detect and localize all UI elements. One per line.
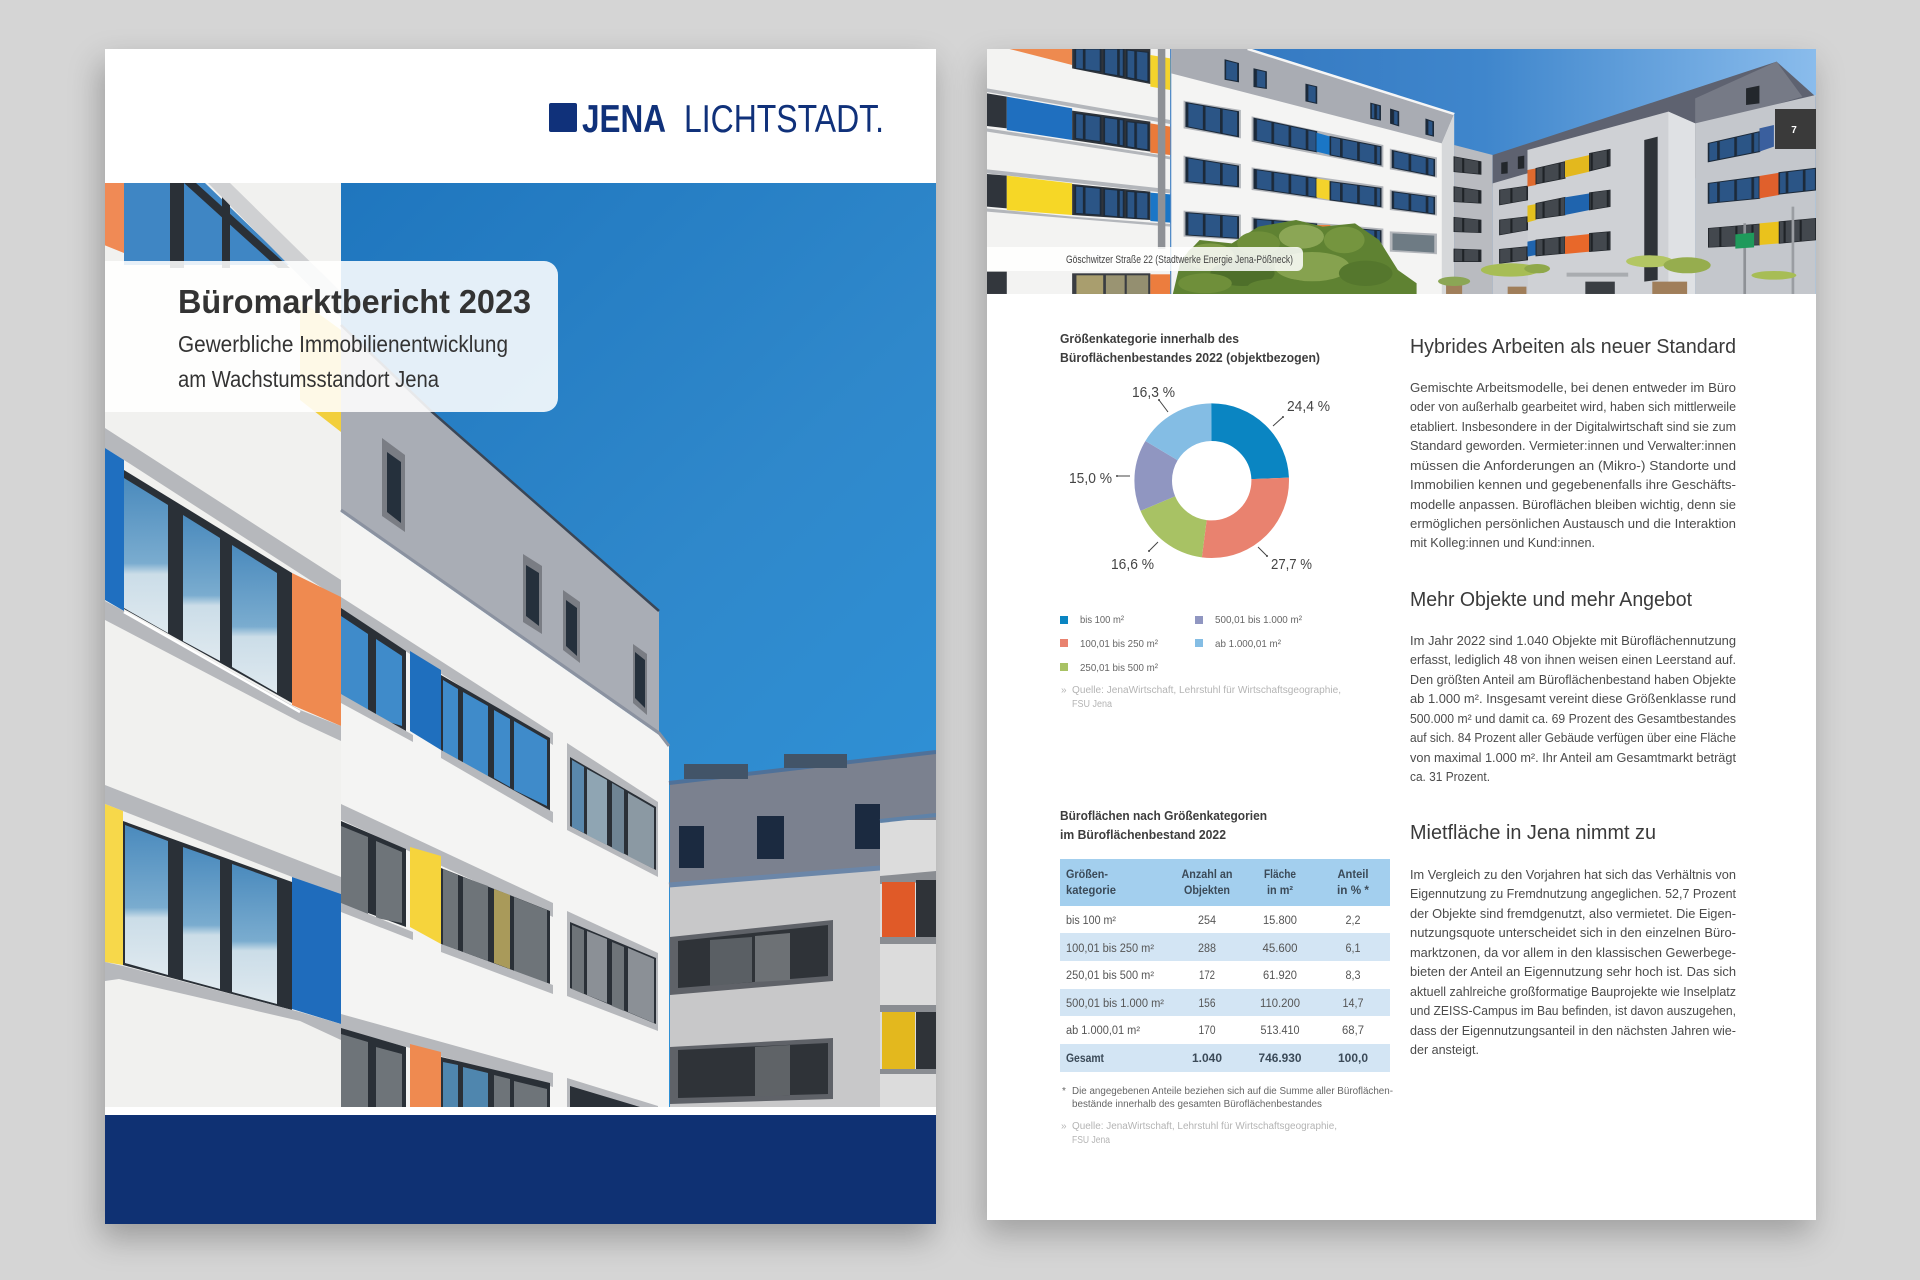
table row: total: 100,0 [1338,1053,1368,1065]
table row: 500 to 1000: 14,7 [1342,998,1364,1010]
table source note: FSU Jena [1072,1135,1110,1146]
table source note: Quelle: JenaWirtschaft, Lehrstuhl für Wirtschaftsgeographie, [1072,1121,1337,1132]
text block: rental space: nutzungsquote unterscheidet sich in den einzelnen Büro- [1410,926,1736,940]
table row: 250 to 500 [1066,970,1360,982]
text block: more objects: Im Jahr 2022 sind 1.040 Objekte mit Büroflächennutzung [1410,634,1736,648]
navy footer band [105,1115,936,1224]
table header: in m² [1267,885,1293,897]
text block: more objects: Den größten Anteil am Büroflächenbestand haben Objekte [1410,673,1736,687]
heading: table: im Büroflächenbestand 2022 [1060,827,1226,842]
table row: bis 100 [1066,915,1360,927]
table header: in % * [1337,885,1370,897]
text block: rental space [1410,868,1737,1057]
table row: 500 to 1000: 110.200 [1260,998,1300,1010]
text block: hybrid work: Standard geworden. Vermieter:innen und Verwalter:innen [1410,439,1736,453]
table row: bis 100: bis 100 m² [1066,915,1116,927]
table row: bis 100: 2,2 [1346,915,1360,927]
inner page white [987,49,1816,1220]
table footnote: Die angegebenen Anteile beziehen sich auf die Summe aller Büroflächen- [1072,1086,1393,1097]
chart legend [1060,614,1302,674]
donut value labels: 16,3 % [1132,385,1175,401]
heading: more objects: Mehr Objekte und mehr Angebot [1410,589,1692,611]
left wing wall [105,183,341,1107]
middle wing row three [341,1014,553,1087]
table header: Anteil [1338,869,1368,881]
table row: 250 to 500: 8,3 [1346,970,1360,982]
heading: donut chart: Größenkategorie innerhalb des [1060,331,1239,346]
table footnote: bestände innerhalb des gesamten Büroflächenbestandes [1072,1099,1322,1110]
cover title: Büromarktbericht 2023 [178,283,531,320]
text block: more objects: auf sich. 84 Prozent aller Gebäude verfügen über eine Fläche [1410,731,1736,745]
table header: Größen- [1066,869,1108,881]
cover subtitle [178,331,508,392]
logo: Jena Lichtstadt [549,98,884,141]
text block: rental space: Eigennutzung zu Fremdnutzung angeglichen. 52,7 Prozent [1410,887,1737,901]
table row: 100 to 250 [1060,933,1390,961]
table row: 250 to 500: 172 [1199,970,1215,982]
heading: donut chart [1060,331,1320,365]
text block: rental space: der Objekte sind fremdgenutzt, also vermietet. Die Eigen- [1410,907,1736,921]
donut value labels: 15,0 % [1069,471,1112,487]
donut value labels: 16,6 % [1111,557,1154,573]
table row: ab 1000: 513.410 [1260,1025,1300,1037]
donut leader lines [1116,399,1284,557]
table row: 100 to 250: 6,1 [1346,943,1360,955]
table header [1060,859,1390,906]
donut value labels: 24,4 % [1287,399,1330,415]
table row: 250 to 500: 61.920 [1263,970,1297,982]
table row: 100 to 250: 288 [1198,943,1216,955]
chart legend: bis 100 m² [1080,614,1124,626]
rear building [670,752,936,890]
heading: rental space: Mietfläche in Jena nimmt zu [1410,822,1656,844]
chart legend: ab 1.000,01 m² [1215,638,1281,650]
text block: more objects: 500.000 m² und damit ca. 69 Prozent des Gesamtbestandes [1410,712,1736,726]
logo: Jena Lichtstadt: LICHTSTADT. [684,98,884,141]
text block: hybrid work: oder von außerhalb gearbeitet wird, haben sich mittlerweile [1410,400,1736,414]
heading: table: Büroflächen nach Größenkategorien [1060,808,1267,823]
table row: ab 1000 [1066,1025,1364,1037]
lower row band, window and blue panel [105,785,341,894]
header photo: Göschwitzer Straße building [987,49,1816,296]
middle wing wall [341,512,669,1107]
table row: 500 to 1000: 156 [1198,998,1216,1010]
text block: rental space: und ZEISS-Campus im Bau befinden, ist davon auszugehen, [1410,1004,1736,1018]
table row: 100 to 250: 100,01 bis 250 m² [1066,943,1154,955]
table row: 500 to 1000 [1060,989,1390,1016]
text block: hybrid work: ermöglichen persönlichen Austausch und die Interaktion [1410,517,1736,531]
table row: total: Gesamt [1066,1053,1104,1065]
cover subtitle: Gewerbliche Immobilienentwicklung [178,331,508,357]
table header: kategorie [1066,885,1116,897]
photo caption: Göschwitzer Straße 22 (Stadtwerke Energie Jena-Pößneck) [1066,254,1293,266]
cover white page [105,49,936,1224]
table row: bis 100: 15.800 [1263,915,1297,927]
rear annex [880,820,936,1107]
donut value labels [1069,385,1330,573]
text block: hybrid work: mit Kolleg:innen und Kund:innen. [1410,536,1595,550]
table footnote: * [1062,1086,1066,1097]
heading: donut chart: Büroflächenbestandes 2022 (objektbezogen) [1060,350,1320,365]
table row: 250 to 500: 250,01 bis 500 m² [1066,970,1154,982]
text block: hybrid work: müssen die Anforderungen an (Mikro-) Standorte und [1410,459,1736,473]
table footnote [1062,1086,1393,1110]
panel: report cover [104,49,936,1224]
photo caption [987,247,1303,271]
table header: Objekten [1184,885,1230,897]
upper row band, window and orange panel [105,428,341,600]
chart source note [1061,685,1341,710]
table row: total: 746.930 [1258,1053,1302,1065]
middle wing row one [341,597,553,745]
donut chart [1069,385,1330,573]
table header: Fläche [1264,869,1296,881]
rooftop floor windows [382,438,405,532]
page number tab [1775,109,1816,149]
donut value labels: 27,7 % [1271,557,1312,573]
table row: ab 1000: 170 [1198,1025,1216,1037]
text block: rental space: der ansteigt. [1410,1043,1479,1057]
text block: hybrid work: etabliert. Insbesondere in der Digitalwirtschaft sind sie zum [1410,420,1736,434]
table: office space by size category [1060,859,1390,1072]
cover subtitle: am Wachstumsstandort Jena [178,366,439,392]
table row: ab 1000: 68,7 [1342,1025,1364,1037]
chart source note: » [1061,685,1067,696]
text block: hybrid work: modelle anpassen. Büroflächen bleiben wichtig, denn sie [1410,498,1736,512]
table row: 500 to 1000: 500,01 bis 1.000 m² [1066,998,1164,1010]
heading: table [1060,808,1267,842]
text block: rental space: dass der Eigennutzungsanteil in den nächsten Jahren wie- [1410,1024,1736,1038]
table row: total [1060,1044,1390,1072]
chart legend: 500,01 bis 1.000 m² [1215,614,1302,626]
table row: ab 1000: ab 1.000,01 m² [1066,1025,1140,1037]
text block: hybrid work [1410,381,1736,550]
table row: 100 to 250: 45.600 [1262,943,1298,955]
text block: more objects: ab 1.000 m². Insgesamt vereint diese Größenklasse rund [1410,692,1736,706]
text block: more objects: von maximal 1.000 m². Ihr Anteil am Gesamtmarkt beträgt [1410,751,1737,765]
text block: rental space: marktzonen, da vor allem in den klassischen Gewerbege- [1410,946,1736,960]
table row: total: 1.040 [1192,1053,1222,1065]
text block: hybrid work: Immobilien kennen und gegebenenfalls ihre Geschäfts- [1410,478,1736,492]
chart source note: FSU Jena [1072,699,1112,710]
middle wing row two [341,804,553,917]
page number tab: 7 [1791,125,1797,136]
chart legend: 100,01 bis 250 m² [1080,638,1158,650]
chart source note: Quelle: JenaWirtschaft, Lehrstuhl für Wirtschaftsgeographie, [1072,685,1341,696]
text block: more objects: ca. 31 Prozent. [1410,770,1490,784]
table row: bis 100: 254 [1198,915,1217,927]
heading: hybrid work: Hybrides Arbeiten als neuer Standard [1410,336,1736,358]
text block: more objects: erfasst, lediglich 48 von ihnen weisen einen Leerstand auf. [1410,653,1736,667]
table header: Anzahl an [1182,869,1232,881]
text block: rental space: Im Vergleich zu den Vorjahren hat sich das Verhältnis von [1410,868,1736,882]
chart legend: 250,01 bis 500 m² [1080,662,1158,674]
text block: rental space: bieten der Anteil an Eigennutzung sehr hoch ist. Das sich [1410,965,1736,979]
panel: report inner page [987,49,1816,1220]
logo: Jena Lichtstadt: JENA [582,98,666,141]
table source note: » [1061,1121,1067,1132]
cover photo: colourful office building [104,183,936,1107]
text block: more objects [1410,634,1737,784]
bush cluster [1173,220,1417,295]
text block: rental space: aktuell zahlreiche großformatige Bauprojekte wie Inselplatz [1410,985,1736,999]
table source note [1061,1121,1337,1146]
title box [105,261,558,412]
text block: hybrid work: Gemischte Arbeitsmodelle, bei denen entweder im Büro [1410,381,1736,395]
